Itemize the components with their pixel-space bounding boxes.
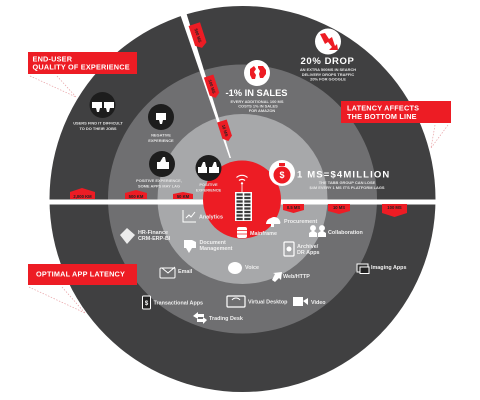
text: 20% drop: 20% FOR GOOGLE [310, 76, 346, 82]
app: voice: Voice [245, 265, 259, 271]
text: negative experience: EXPERIENCE [148, 138, 174, 143]
diagonal latency tags: 10 MS [221, 124, 229, 137]
text: positive experience some apps may lag [136, 178, 182, 188]
icon: thumb up [149, 151, 175, 177]
app: video [293, 297, 326, 306]
icon: falling chart [315, 28, 341, 54]
icon: stopwatch with dollar [269, 160, 295, 186]
app: mainframe: Mainframe [250, 231, 277, 237]
text: positive experience some apps may lag: POSITIVE EXPERIENCE, [136, 178, 182, 183]
app: transactional apps: $ [145, 301, 149, 307]
text: users find it difficult: TO DO THEIR JOBS [79, 126, 117, 131]
heading: end-user quality of experience: QUALITY OF EXPERIENCE [32, 62, 130, 72]
app: virtual desktop [227, 296, 288, 307]
app: procurement [266, 217, 317, 227]
heading: latency affects the bottom line: LATENCY AFFECTS [347, 104, 419, 112]
text: 1 ms = $4 million: THE TABB GROUP CAN LOSE [319, 180, 376, 185]
text: 20% drop: DELIVERY DROPS TRAFFIC [302, 72, 354, 77]
distance tags: 2,000 KM [73, 194, 92, 199]
icon: two thumbs up [196, 155, 222, 181]
heading: end-user quality of experience: END-USER [32, 54, 73, 64]
app: document management: Document [200, 240, 226, 246]
text: 20% drop [300, 56, 356, 82]
heading: optimal app latency [28, 264, 137, 313]
text: 20% drop: AN EXTRA 500MS IN SEARCH [300, 67, 356, 72]
app: web/http [272, 272, 310, 282]
text: positive experience [196, 182, 222, 192]
app: archive / dr apps: Archive/ [297, 244, 319, 250]
heading: end-user quality of experience [28, 52, 137, 97]
latency tags: 100 MS [387, 205, 402, 210]
heading: optimal app latency: OPTIMAL APP LATENCY [36, 270, 125, 278]
text: negative experience: NEGATIVE [151, 132, 171, 138]
text: positive experience some apps may lag: SOME APPS MAY LAG [138, 183, 180, 188]
icon: broken piggy bank [244, 60, 270, 86]
diagonal latency tags: 100 MS [207, 79, 217, 94]
app: document management: Management [200, 246, 233, 252]
app: video: Video [311, 300, 326, 306]
latency tags: 0.5 MS [287, 205, 300, 210]
icon: thumb down [148, 104, 174, 130]
icon: two thumbs down [90, 92, 116, 118]
text: -1% in sales [226, 88, 288, 113]
app: archive / dr apps: DR Apps [297, 250, 320, 256]
app: hr-finance crm-erp-bi: CRM-ERP-BI [138, 236, 171, 242]
app: hr-finance crm-erp-bi [120, 228, 171, 244]
text: users find it difficult: USERS FIND IT DIFFICULT [73, 120, 123, 126]
text: -1% in sales: FOR AMAZON [249, 108, 275, 113]
app: collaboration [309, 225, 363, 237]
app: transactional apps: Transactional Apps [154, 300, 203, 306]
app: archive / dr apps [284, 242, 320, 256]
text: 1 ms = $4 million: 1 MS=$4MILLION [297, 170, 390, 180]
app: trading desk: Trading Desk [209, 316, 243, 322]
latency tags: 10 MS [333, 205, 345, 210]
app: transactional apps [142, 296, 203, 309]
diagonal latency tags [189, 22, 233, 143]
text: -1% in sales: EVERY ADDITIONAL 100 MS [231, 99, 284, 104]
app: email [160, 267, 193, 278]
text: 1 ms = $4 million [297, 170, 390, 190]
text: 1 ms = $4 million: $4M EVERY 1 MS IT'S PLATFORM LAGS [309, 185, 385, 190]
text: -1% in sales: -1% IN SALES [226, 88, 288, 98]
heading: latency affects the bottom line [341, 101, 451, 148]
icon: central server tower with wifi [235, 175, 252, 221]
latency tags [283, 204, 407, 217]
app: virtual desktop: Virtual Desktop [248, 299, 288, 305]
app: web/http: Web/HTTP [283, 274, 310, 280]
app: analytics [183, 210, 223, 222]
text: positive experience: EXPERIENCE [196, 188, 222, 192]
app: analytics: Analytics [199, 214, 223, 220]
app: document management [184, 240, 233, 253]
heading: latency affects the bottom line: THE BOTTOM LINE [347, 112, 417, 121]
app: trading desk [193, 312, 243, 324]
distance tags: 50 KM [177, 194, 190, 199]
app: procurement: Procurement [284, 219, 317, 225]
icon: stopwatch with dollar: $ [279, 170, 285, 180]
app: hr-finance crm-erp-bi: HR-Finance [138, 230, 168, 236]
app: mainframe [237, 227, 277, 238]
text: positive experience: POSITIVE [199, 182, 218, 187]
text: users find it difficult [73, 120, 123, 131]
distance tags: 500 KM [129, 194, 144, 199]
app: imaging apps: Imaging Apps [371, 265, 406, 271]
text: negative experience [148, 132, 174, 143]
app: email: Email [178, 269, 193, 275]
text: -1% in sales: COSTS 1% IN SALES [238, 103, 278, 108]
diagonal latency tags: 500 MS [193, 28, 203, 43]
text: 20% drop: 20% DROP [301, 56, 355, 67]
app: voice [228, 262, 259, 274]
distance tags [70, 188, 193, 199]
app: imaging apps [357, 264, 406, 274]
app: collaboration: Collaboration [328, 230, 363, 236]
